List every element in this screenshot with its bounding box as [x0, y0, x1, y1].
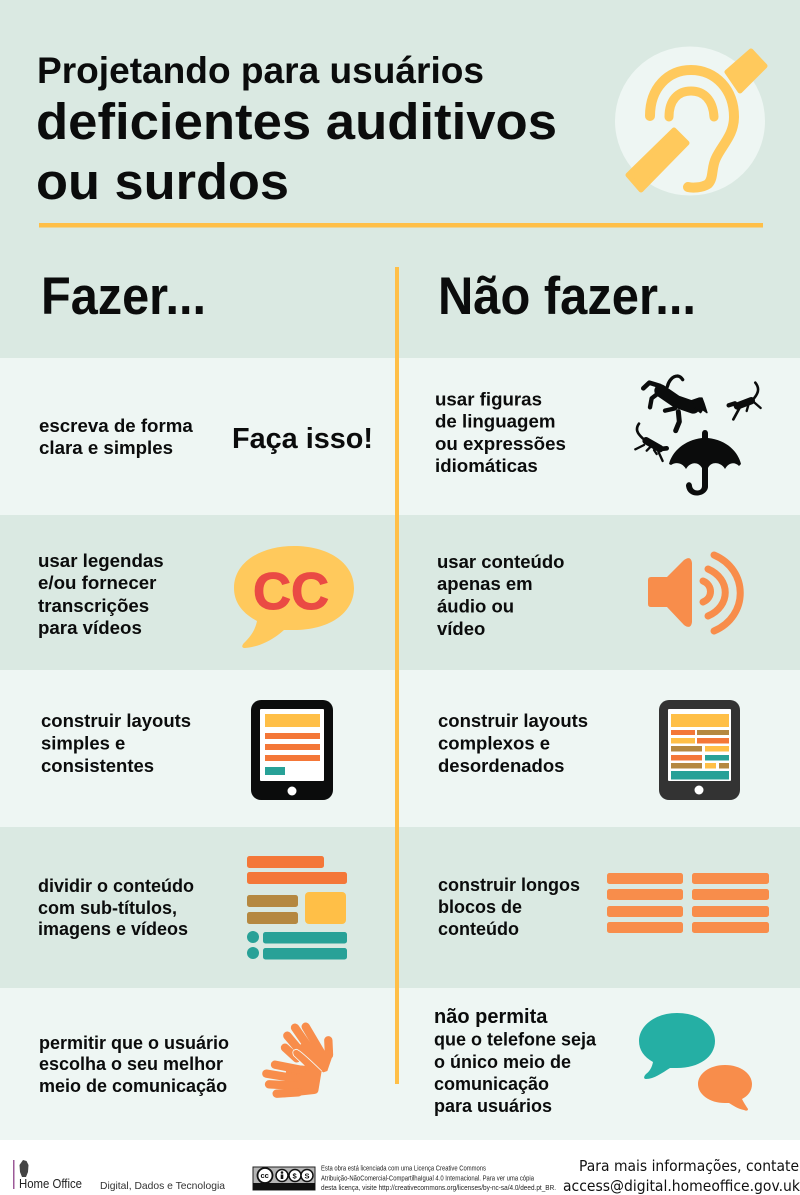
captions label: CC [253, 563, 329, 621]
icon: speaker [648, 555, 740, 631]
dont 3 text: complexos e [438, 732, 550, 754]
title [36, 50, 557, 210]
dont 3 text: construir layouts [438, 710, 588, 731]
dont 4 text: construir longos [438, 875, 580, 895]
dog [643, 376, 707, 431]
footer: licence text: desta licença, visite http://creativecommons.org/licenses/by-nc-sa/4.0/deed.pt_BR. [321, 1185, 556, 1192]
footer: department name: Digital, Dados e Tecnologia [100, 1180, 225, 1192]
dont 3 text: desordenados [438, 755, 564, 776]
heading: Não fazer: Não fazer... [438, 267, 696, 326]
dont 1 text: usar figuras [435, 388, 542, 410]
dont 1 text: ou expressões [435, 433, 566, 454]
dont 5 text: o único meio de [434, 1052, 571, 1072]
do 2 text: e/ou fornecer [38, 572, 156, 593]
cat left [635, 424, 667, 461]
front hand [266, 1049, 322, 1097]
icon: cluttered tablet [659, 700, 740, 800]
icon: speech bubbles [639, 1013, 752, 1111]
do 2 text: para vídeos [38, 617, 142, 638]
dont 2 text: usar conteúdo [437, 551, 564, 572]
dont 2 text: vídeo [437, 618, 485, 639]
dont 4 text: conteúdo [438, 919, 519, 939]
cat right [729, 383, 761, 419]
do 1 text: escreva de forma [39, 415, 193, 436]
do 1 example: Faça isso! [232, 423, 373, 455]
icon: raining cats and dogs with umbrella [635, 376, 761, 496]
footer: creative commons badge: $ [292, 1172, 298, 1180]
dont 2 text: apenas em [437, 573, 533, 594]
footer: creative commons badge: S [304, 1172, 310, 1180]
icon: closed captions speech bubble [234, 546, 354, 648]
footer: creative commons badge [253, 1167, 315, 1190]
do 4 text: dividir o conteúdo [38, 876, 194, 896]
title: deficientes auditivos [36, 93, 557, 150]
dont 1 text: de linguagem [435, 410, 555, 432]
umbrella [669, 430, 741, 496]
do 2 text: transcrições [38, 595, 149, 616]
do 4 text: imagens e vídeos [38, 919, 188, 939]
icon: long text blocks [607, 873, 769, 933]
do 3 text: construir layouts [41, 710, 191, 731]
do 3 text: consistentes [41, 755, 154, 776]
do 5 text: permitir que o usuário [39, 1033, 229, 1053]
do 5 text: meio de comunicação [39, 1076, 227, 1096]
footer: creative commons badge: cc [260, 1171, 269, 1180]
do 1 text: clara e simples [39, 437, 173, 458]
do 2 text: usar legendas [38, 550, 164, 571]
footer: licence text: Atribuição-NãoComercial-CompartilhaIgual 4.0 Internacional. Para ver uma cópia [321, 1176, 534, 1182]
back hand [285, 1027, 333, 1072]
icon: deaf ear symbol [615, 46, 765, 196]
dont 2 text: áudio ou [437, 596, 514, 616]
heading: Fazer: Fazer... [41, 267, 206, 326]
footer: licence text: Esta obra está licenciada com uma Licença Creative Commons [321, 1166, 486, 1172]
do 4 text: com sub-títulos, [38, 898, 177, 918]
title: ou surdos [36, 153, 289, 210]
icon: signing hands [266, 1027, 333, 1097]
dont 5 text: que o telefone seja [434, 1030, 597, 1050]
column divider [395, 267, 399, 1084]
dont 5 text: comunicação [434, 1074, 549, 1094]
do 5 text: escolha o seu melhor [39, 1054, 223, 1074]
footer: Home Office logo: Home Office [19, 1176, 82, 1191]
icon: structured page layout [247, 856, 347, 960]
dont 5 text: não permita [434, 1006, 548, 1028]
icon: simple tablet [251, 700, 333, 800]
title: Projetando para usuários [37, 50, 484, 91]
dont 4 text: blocos de [438, 897, 522, 917]
dont 5 text: para usuários [434, 1096, 552, 1116]
do 3 text: simples e [41, 732, 125, 754]
dont 1 text: idiomáticas [435, 455, 538, 476]
footer: Home Office logo [13, 1160, 82, 1191]
